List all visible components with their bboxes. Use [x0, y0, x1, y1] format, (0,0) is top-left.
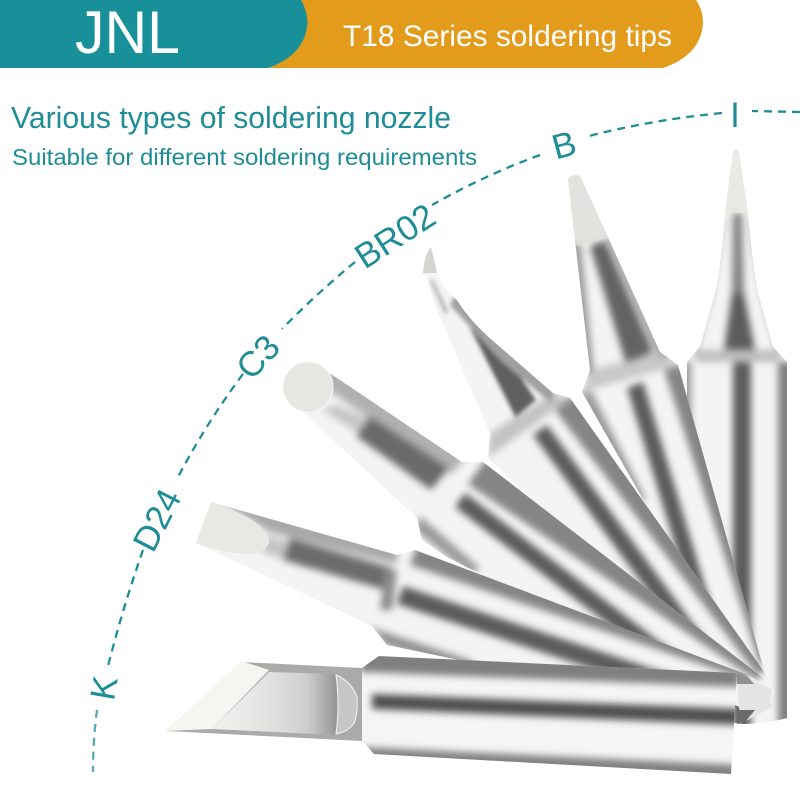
tip C3: round face — [283, 362, 333, 412]
label C3: C3 — [229, 328, 288, 387]
heading: Various types of soldering nozzle — [11, 100, 451, 135]
dashed arc with tip labels — [83, 96, 800, 772]
soldering tip BR02 — [423, 247, 766, 678]
tip I: pale end — [725, 149, 748, 213]
subheading: Suitable for different soldering requirements — [12, 144, 477, 170]
label I: I — [730, 96, 740, 135]
banner: orange series strip — [200, 0, 703, 68]
soldering tip B — [568, 174, 774, 694]
tip K: ground flat — [212, 672, 357, 735]
soldering tip D24 — [199, 503, 760, 683]
soldering tip I — [687, 149, 787, 724]
soldering tip K — [166, 656, 773, 774]
banner: teal brand strip — [0, 0, 308, 68]
label B: B — [548, 124, 580, 167]
tip K: cylinder body — [362, 656, 737, 774]
series title: T18 Series soldering tips — [343, 20, 672, 53]
label D24: D24 — [125, 483, 189, 558]
tip K: blade — [166, 662, 362, 741]
tip K: neck — [362, 656, 379, 754]
tip K: white bevel — [166, 661, 269, 731]
tip B: pale end — [568, 175, 608, 246]
soldering tip C3 — [304, 372, 764, 707]
label K: K — [83, 673, 126, 703]
tip BR02: hooked end — [423, 247, 437, 273]
tip D24: chisel face — [196, 502, 269, 554]
tip K: rounded scoop — [336, 675, 357, 734]
brand name: JNL — [75, 0, 180, 66]
label BR02: BR02 — [348, 196, 443, 277]
header banner — [0, 0, 703, 68]
dashed arc — [93, 111, 800, 772]
tip K: converging back ends — [737, 673, 773, 724]
